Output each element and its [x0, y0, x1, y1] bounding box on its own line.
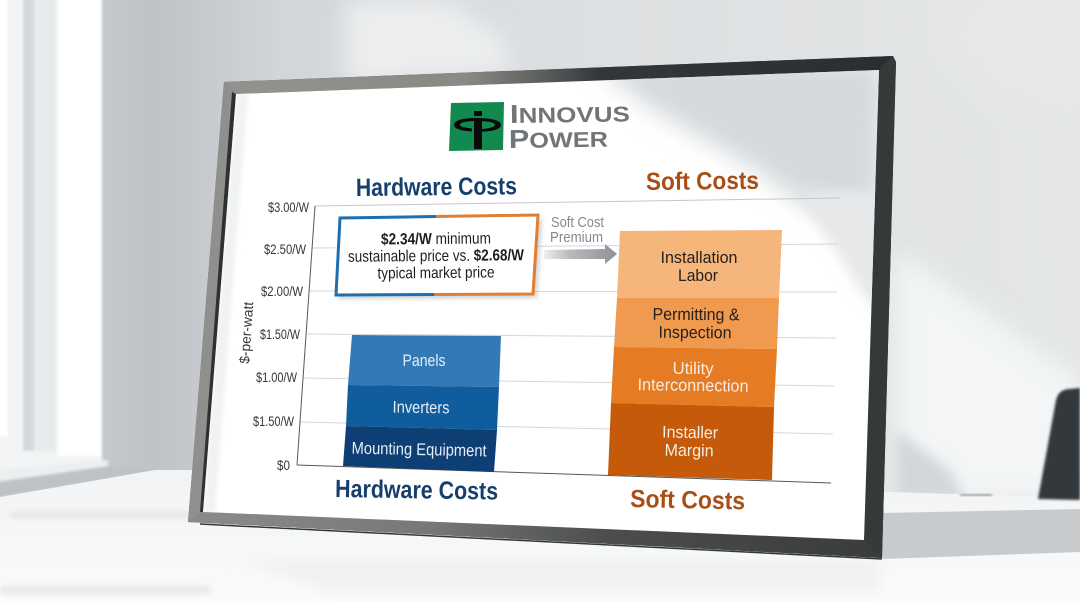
- heading: hardware costs bottom: Hardware Costs: [335, 475, 498, 506]
- segment: inverters: Inverters: [392, 398, 450, 417]
- table shadows: [10, 512, 190, 518]
- arrow: [544, 244, 617, 264]
- segment: panels: Panels: [402, 351, 446, 370]
- segment: utility interconnection: [611, 347, 777, 407]
- logo wordmark: [509, 97, 630, 154]
- y axis labels: $3.00/W: [268, 200, 309, 215]
- segment: utility interconnection: Utility: [672, 359, 714, 378]
- segment: utility interconnection: Interconnection: [637, 375, 749, 396]
- segment: permitting and inspection: [614, 298, 779, 349]
- logo wordmark: POWER: [509, 123, 609, 154]
- premium label: [550, 214, 605, 246]
- table surface: [0, 470, 1080, 603]
- window: [0, 0, 155, 498]
- callout: typical market price: [377, 264, 495, 283]
- logo: [449, 97, 630, 154]
- segment: mounting equipment: [343, 426, 497, 472]
- segment: installer margin: [608, 403, 774, 480]
- segment: installer margin: Margin: [664, 441, 714, 460]
- heading: soft costs top: Soft Costs: [646, 167, 759, 196]
- segment: permitting and inspection: Inspection: [658, 323, 732, 342]
- segment: panels: [348, 335, 501, 387]
- segment: installation labor: Installation: [660, 248, 738, 267]
- y axis labels: $0: [277, 458, 290, 473]
- y axis labels: $1.00/W: [256, 370, 297, 385]
- display frame: [188, 56, 896, 559]
- y axis title: $-per-watt: [236, 301, 256, 364]
- logo mark: green square: [449, 102, 504, 151]
- bar: soft costs: [608, 230, 782, 480]
- screen: [203, 60, 885, 540]
- segment: permitting and inspection: Permitting &: [652, 305, 740, 324]
- bar: hardware costs: [343, 335, 501, 472]
- premium label: Soft Cost: [551, 214, 605, 231]
- far table edge shadow band: [882, 509, 1080, 559]
- segment: installation labor: Labor: [678, 266, 718, 285]
- segment: inverters: [346, 385, 499, 430]
- callout: $2.34/W minimum: [381, 231, 491, 248]
- callout: [336, 215, 542, 299]
- segment: installer margin: Installer: [662, 423, 719, 442]
- y axis labels: [253, 200, 309, 473]
- y axis labels: $2.50/W: [264, 242, 306, 257]
- segment: mounting equipment: Mounting Equipment: [351, 439, 487, 460]
- logo wordmark: INNOVUS: [510, 97, 630, 129]
- y axis labels: $2.00/W: [261, 284, 303, 299]
- heading: soft costs bottom: Soft Costs: [630, 485, 745, 515]
- callout: sustainable price vs. $2.68/W: [348, 247, 525, 266]
- chart: gridlines and axis: [297, 198, 840, 483]
- screen light shading: [203, 60, 885, 512]
- y axis labels: $1.50/W: [253, 414, 294, 429]
- heading: hardware costs top: Hardware Costs: [356, 172, 517, 202]
- y axis labels: $1.50/W: [260, 327, 300, 342]
- premium label: Premium: [550, 229, 603, 246]
- chair: [1038, 388, 1080, 500]
- segment: installation labor: [617, 230, 782, 298]
